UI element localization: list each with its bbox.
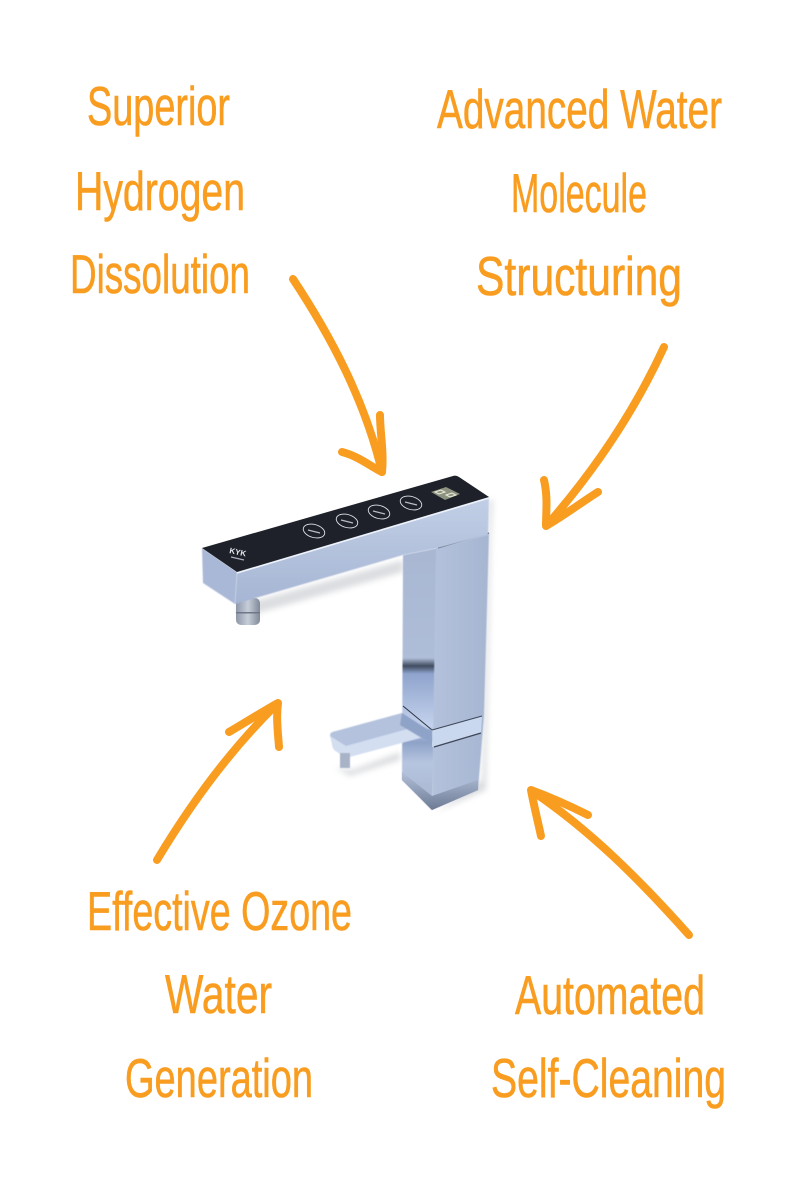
arrow: top right pointing to faucet xyxy=(544,347,664,526)
column left face xyxy=(402,548,438,810)
column top seam xyxy=(438,533,489,548)
top edge highlight xyxy=(237,498,489,573)
brand mark: KYK xyxy=(229,546,247,559)
heading: Advanced Water Molecule Structuring xyxy=(437,78,722,307)
heading: Effective Ozone Water Generation: Generation xyxy=(125,1047,313,1109)
faucet product image xyxy=(202,476,493,812)
heading: Superior Hydrogen Dissolution: Hydrogen xyxy=(75,160,245,222)
column seam band xyxy=(403,706,482,747)
small lower spout xyxy=(330,713,432,768)
heading: Superior Hydrogen Dissolution xyxy=(70,75,250,305)
heading: Effective Ozone Water Generation: Effective Ozone xyxy=(87,880,352,942)
control panel top face xyxy=(202,476,489,572)
faucet shadows xyxy=(237,500,493,812)
spout left end face xyxy=(202,548,237,604)
heading: Effective Ozone Water Generation: Water xyxy=(165,963,272,1025)
heading: Automated Self-Cleaning xyxy=(491,964,726,1109)
heading: Advanced Water Molecule Structuring: Structuring xyxy=(476,245,682,307)
nozzle xyxy=(236,598,260,625)
touch buttons xyxy=(302,494,423,540)
arrow: bottom right pointing up to faucet xyxy=(531,790,689,935)
arrow: top left pointing to faucet panel xyxy=(293,279,383,472)
heading: Automated Self-Cleaning: Automated xyxy=(515,964,705,1026)
spout front face xyxy=(235,497,489,604)
column right face xyxy=(432,533,489,810)
heading: Superior Hydrogen Dissolution: Dissolution xyxy=(70,243,250,305)
arrow: bottom left pointing up to faucet xyxy=(157,703,279,860)
heading: Superior Hydrogen Dissolution: Superior xyxy=(87,75,230,137)
heading: Advanced Water Molecule Structuring: Molecule xyxy=(511,162,647,224)
column base reflection xyxy=(402,772,478,810)
heading: Effective Ozone Water Generation xyxy=(87,880,352,1109)
digital display xyxy=(431,487,460,500)
